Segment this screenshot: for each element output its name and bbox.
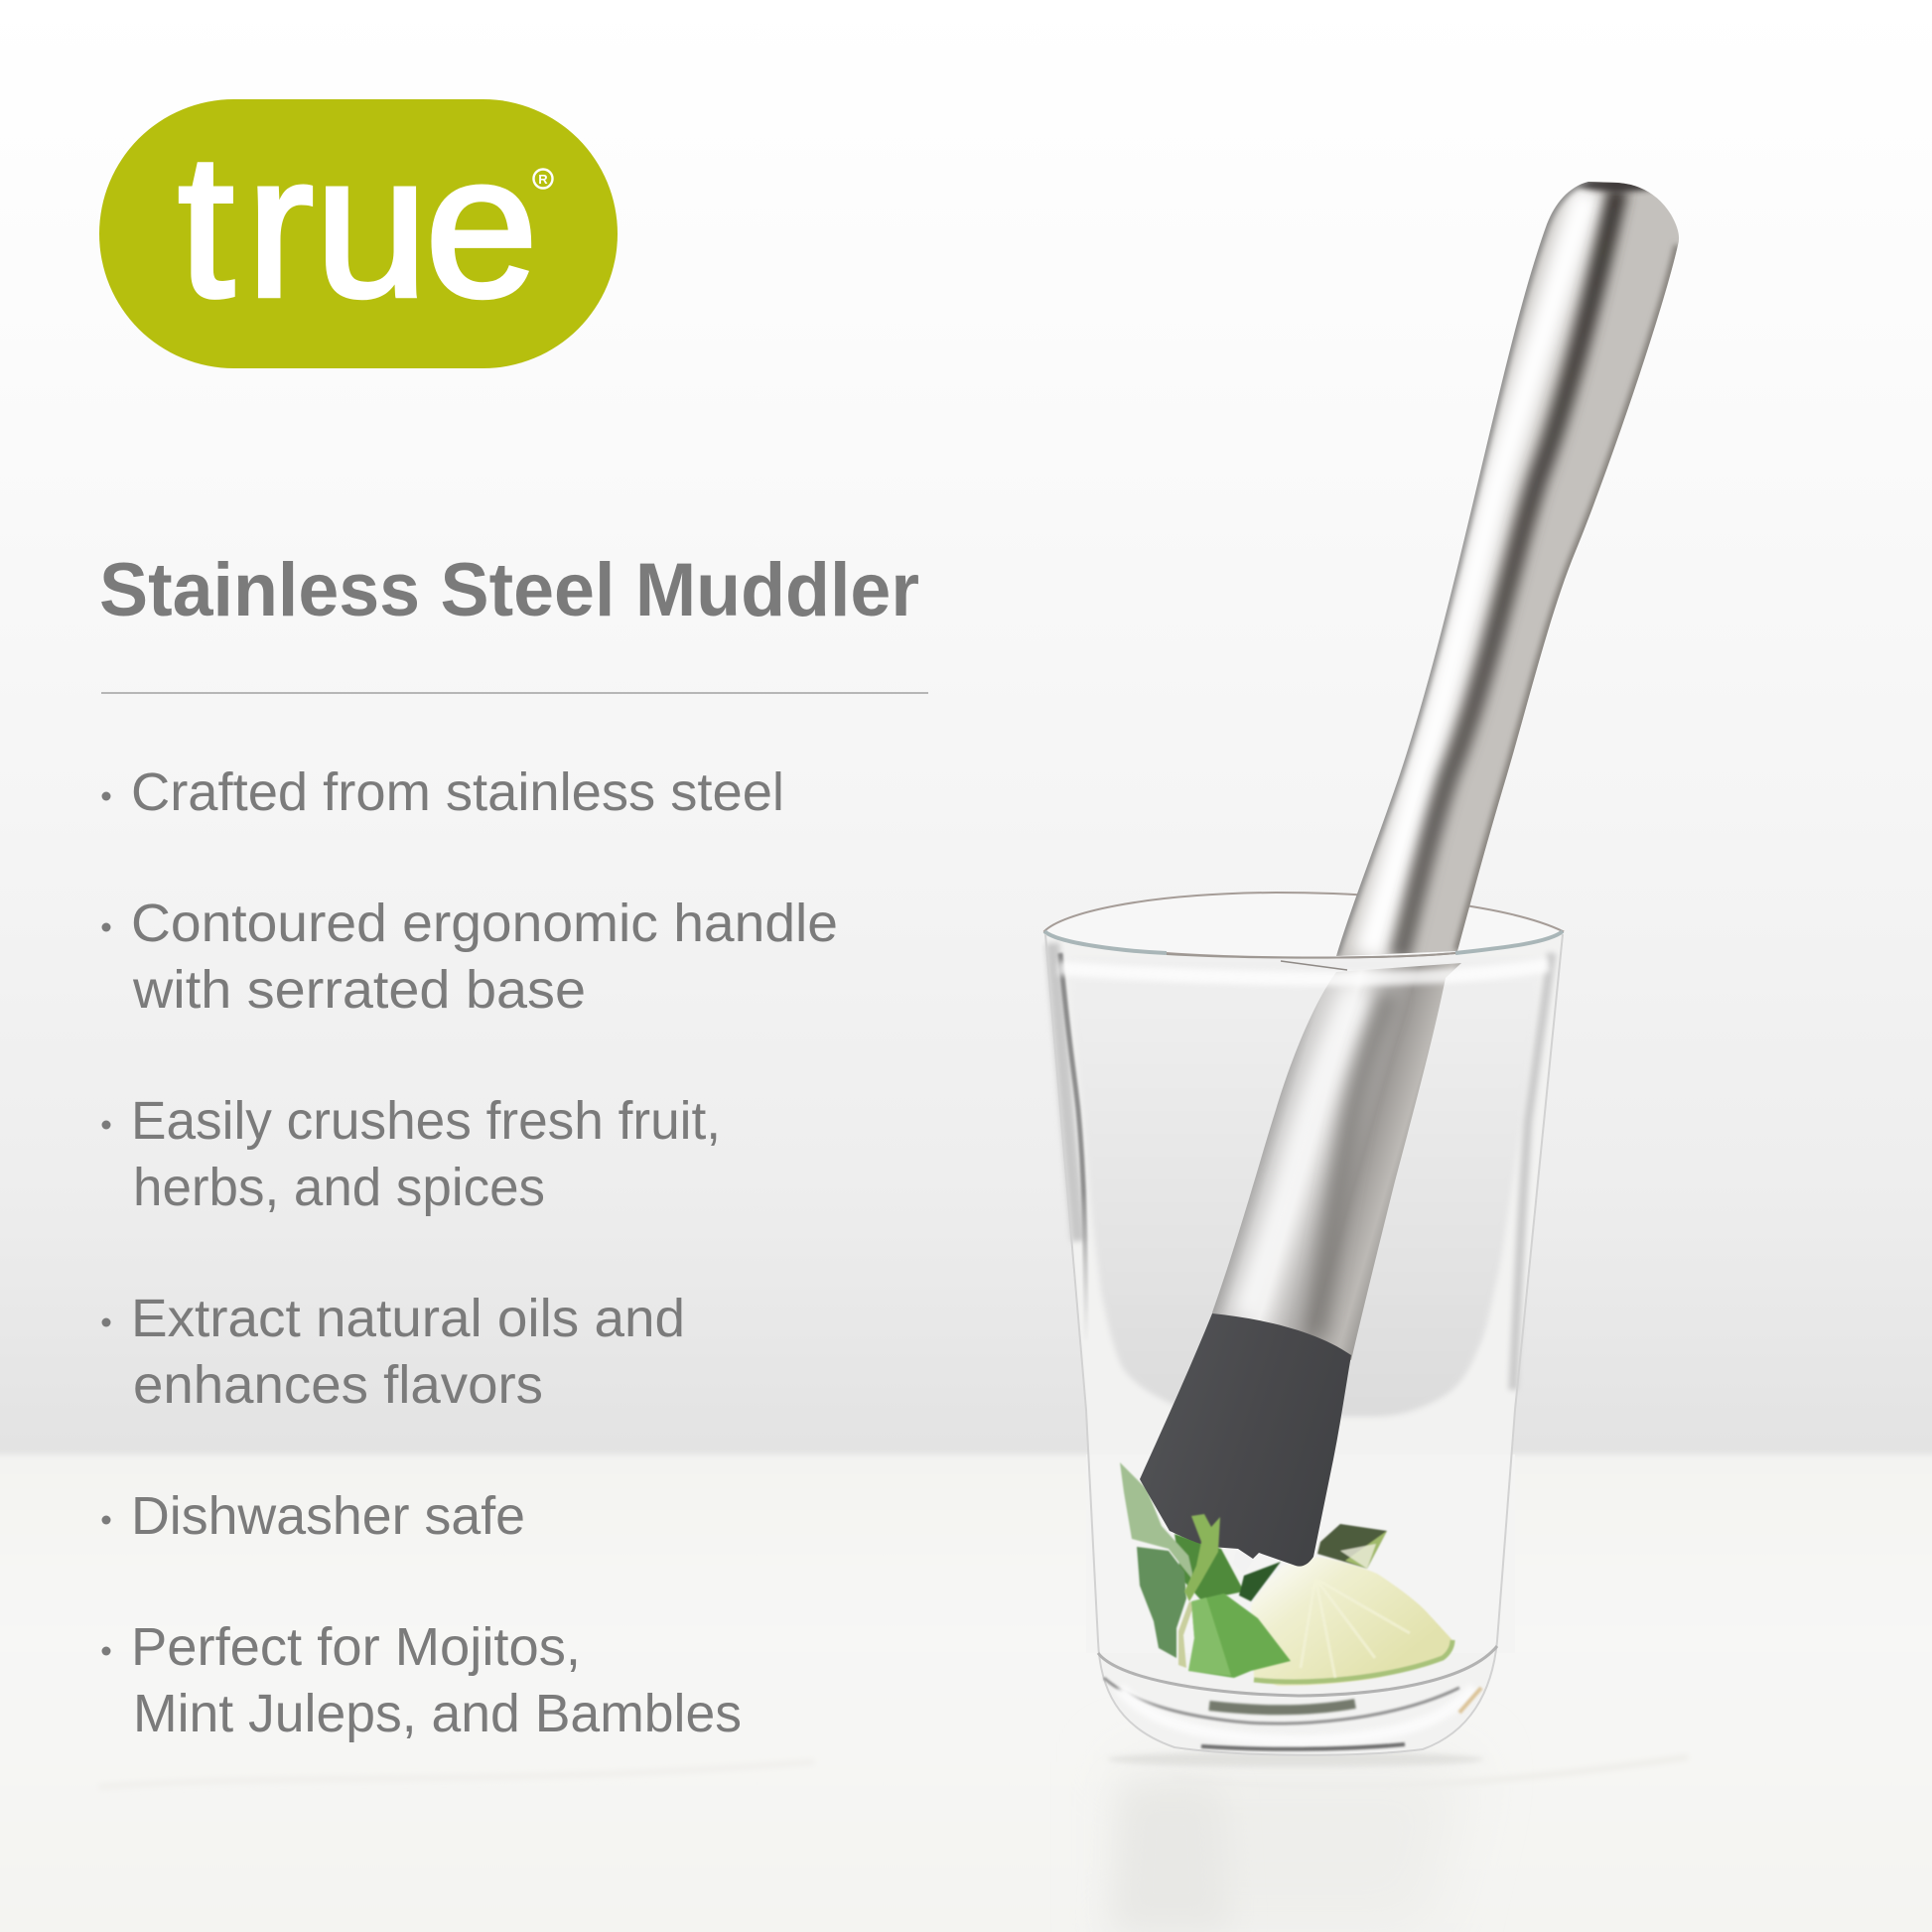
glass shadow on table [1107,1751,1484,1767]
bullet: contoured ergonomic handle: with serrated base [132,960,586,1020]
feature list [101,762,838,1743]
bullet: crafted from stainless steel: Crafted from stainless steel [131,762,784,822]
muddler handle upper [1336,182,1679,956]
bullet: extract natural oils [101,1289,685,1415]
mint leaves behind muddler [1120,1462,1281,1658]
dark cap of handle [1578,182,1651,196]
glass wall shading [1052,943,1078,1241]
bullet: perfect for: Perfect for Mojitos, [131,1617,581,1677]
registered mark: R [538,172,548,187]
bullet: contoured ergonomic handle [101,894,838,1020]
inner gray bowl [1067,958,1541,1417]
bullet: extract natural oils: enhances flavors [133,1355,543,1415]
bullet: perfect for: Mint Juleps, and Bambles [133,1684,742,1743]
bullet: dishwasher safe: Dishwasher safe [131,1486,525,1546]
registered mark [534,169,552,189]
muddler handle lower in glass [1212,963,1461,1360]
right rim shading [1457,245,1678,951]
glass thick base [1098,1646,1497,1749]
mint sprig and front leaf [1178,1514,1291,1678]
lime wedge [1251,1524,1452,1686]
bullet: contoured ergonomic handle: Contoured ergonomic handle [131,894,838,953]
logo: true pill [99,99,618,368]
glass reflection on table [1122,1762,1469,1932]
glass interior [1045,934,1563,1755]
bullet: perfect for [101,1617,742,1743]
dark stripe [1400,189,1618,958]
bullet: extract natural oils: Extract natural oils and [131,1289,685,1348]
marble table surface [0,1454,1932,1932]
background wall [0,0,1932,1469]
product photo: glass with muddler, mint and lime [1044,169,1698,1767]
muddler rubber foot [1140,1313,1351,1567]
glass mouth and back rim [1044,893,1563,957]
bullet: easily crushes [101,1091,721,1217]
logo wordmark: true [178,112,538,340]
left rim shading [1336,182,1588,956]
highlight stripe [1368,189,1588,958]
bullet: easily crushes: herbs, and spices [133,1158,545,1217]
glass front rim and outline [1044,931,1563,1755]
bullet: easily crushes: Easily crushes fresh fruit, [131,1091,721,1151]
title: Stainless Steel Muddler [99,548,919,632]
